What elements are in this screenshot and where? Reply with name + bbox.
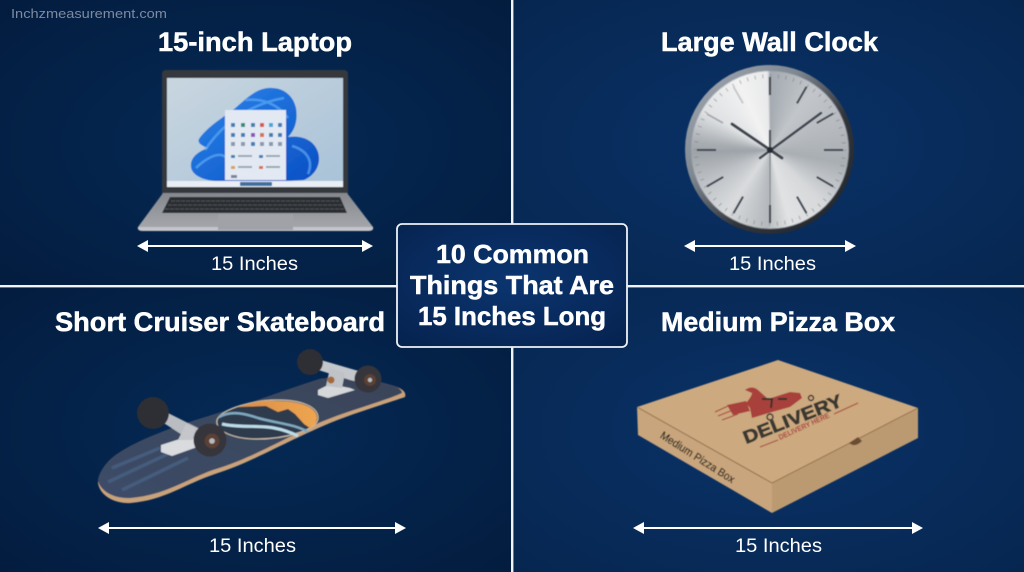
text: delivery logo: DELIVERY [740,391,845,448]
text: side print: Medium Pizza Box [658,430,737,486]
panel: short cruiser skateboard [55,307,406,557]
title: Things That Are [410,270,614,300]
title: 10 Common [436,239,589,269]
heading: skateboard: Short Cruiser Skateboard [55,307,385,337]
heading: pizza box: Medium Pizza Box [661,307,895,337]
label: laptop size: 15 Inches [211,254,298,275]
panel: large wall clock [661,27,879,275]
deck graphic [217,400,318,439]
label: skateboard size: 15 Inches [209,536,296,557]
arrow: skateboard length [98,522,406,534]
panel: medium pizza box [633,307,923,557]
title: 15 Inches Long [418,301,606,331]
icon: skateboard [98,349,405,503]
center title box [397,224,627,347]
arrow: clock width [684,240,856,252]
title [410,239,614,331]
panel: 15-inch laptop [137,27,373,275]
heading: laptop: 15-inch Laptop [158,27,352,57]
label: clock size: 15 Inches [729,254,816,275]
watermark: Inchzmeasurement.com [11,6,167,21]
clock case [685,65,854,234]
rear truck [312,358,366,384]
icon: pizza box [637,360,918,513]
heading: clock: Large Wall Clock [661,27,879,57]
label: pizza box size: 15 Inches [735,536,822,557]
arrow: pizza box width [633,522,923,534]
wheels [137,397,169,429]
text: delivery here: DELIVERY HERE [777,411,831,442]
icon: clock [696,76,844,224]
icon: laptop [138,70,373,231]
arrow: laptop width [137,240,373,252]
clock face sweep [691,71,849,229]
front truck [156,408,204,444]
